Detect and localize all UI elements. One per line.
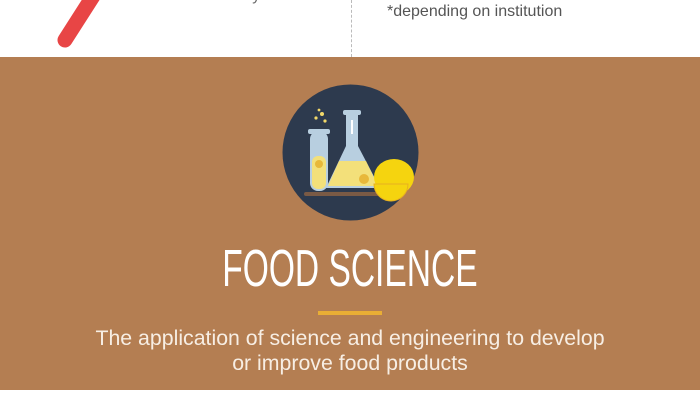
accent bar	[318, 311, 382, 315]
text: description: The application of science and engineering to develop	[95, 326, 605, 350]
text: footnote: *depending on institution	[387, 3, 562, 20]
heading: FOOD SCIENCE: FOOD SCIENCE	[222, 240, 478, 298]
icon: lab flask and lemon	[282, 84, 418, 220]
text: description: or improve food products	[232, 351, 468, 375]
icon: red pencil stroke	[58, 0, 100, 48]
panel: top partial section	[58, 0, 562, 57]
dashed divider	[351, 0, 352, 57]
text: description	[95, 326, 605, 375]
